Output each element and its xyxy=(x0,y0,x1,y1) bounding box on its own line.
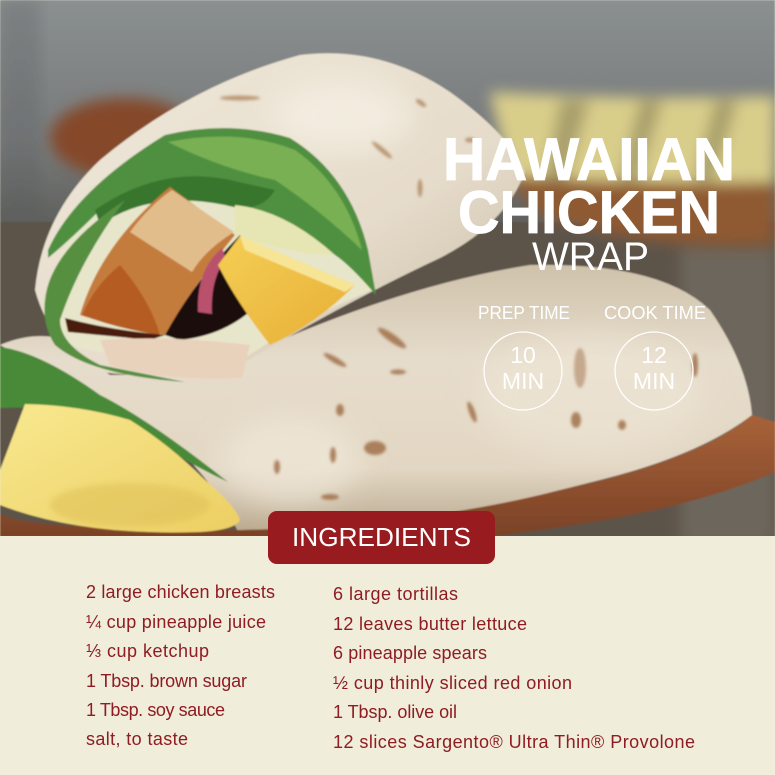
ingredients list: right column: 1 Tbsp. olive oil xyxy=(333,702,457,722)
ingredients list: right column: 6 pineapple spears xyxy=(333,643,487,663)
ingredients list: right column: 12 leaves butter lettuce xyxy=(333,614,527,634)
blurred background wall xyxy=(0,0,775,240)
ingredients list: left column xyxy=(86,582,275,749)
ingredients list: left column: 1 Tbsp. soy sauce xyxy=(86,700,225,720)
red onion xyxy=(198,248,226,314)
prep time xyxy=(478,303,570,410)
background bowl left xyxy=(50,98,200,178)
upper lettuce xyxy=(48,128,376,295)
ingredients list: right column: 6 large tortillas xyxy=(333,584,458,604)
ingredients list: left column: 1 Tbsp. brown sugar xyxy=(86,671,247,691)
wrap interior xyxy=(66,237,372,356)
ingredients heading: INGREDIENTS xyxy=(292,522,471,552)
background bowl right and pineapple xyxy=(490,92,775,246)
cook time: MIN xyxy=(633,368,675,394)
ingredients panel background xyxy=(0,536,775,775)
prep time: 10 xyxy=(510,342,536,368)
ingredients list: right column: ½ cup thinly sliced red onion xyxy=(333,673,572,693)
ingredients list: left column: ⅓ cup ketchup xyxy=(86,641,209,661)
lower wrap xyxy=(0,265,752,536)
ingredients list: left column: 2 large chicken breasts xyxy=(86,582,275,602)
title: HAWAIIAN xyxy=(443,126,735,193)
wooden table xyxy=(0,222,775,542)
ingredients list: left column: salt, to taste xyxy=(86,729,188,749)
cook time: 12 xyxy=(641,342,667,368)
title: WRAP xyxy=(532,235,649,279)
prep time: MIN xyxy=(502,368,544,394)
dark sauce and shadow xyxy=(164,234,248,340)
dark photo edge on left wall xyxy=(0,0,38,204)
title: CHICKEN xyxy=(458,179,720,246)
lower wrap filling: pineapple xyxy=(0,404,240,532)
ingredients list: left column: ¼ cup pineapple juice xyxy=(86,612,266,632)
upper wrap tortilla xyxy=(35,53,525,375)
ingredients heading xyxy=(268,511,495,564)
ingredients list: right column: 12 slices Sargento® Ultra Thin® Provolone xyxy=(333,732,695,752)
chicken slice xyxy=(100,338,250,379)
title xyxy=(443,126,735,279)
plate xyxy=(0,415,775,536)
lower wrap filling: lettuce xyxy=(0,347,228,482)
upper toast marks xyxy=(220,96,475,197)
cheese slice xyxy=(235,205,335,255)
cook time: COOK TIME xyxy=(604,303,706,323)
pineapple chunk xyxy=(218,236,355,345)
prep time: PREP TIME xyxy=(478,303,570,323)
photo: wraps on a plate xyxy=(0,0,775,545)
lower wrap toast marks xyxy=(274,325,698,500)
ingredients list: right column xyxy=(333,584,695,752)
cook time xyxy=(604,303,706,410)
chicken xyxy=(80,187,235,335)
